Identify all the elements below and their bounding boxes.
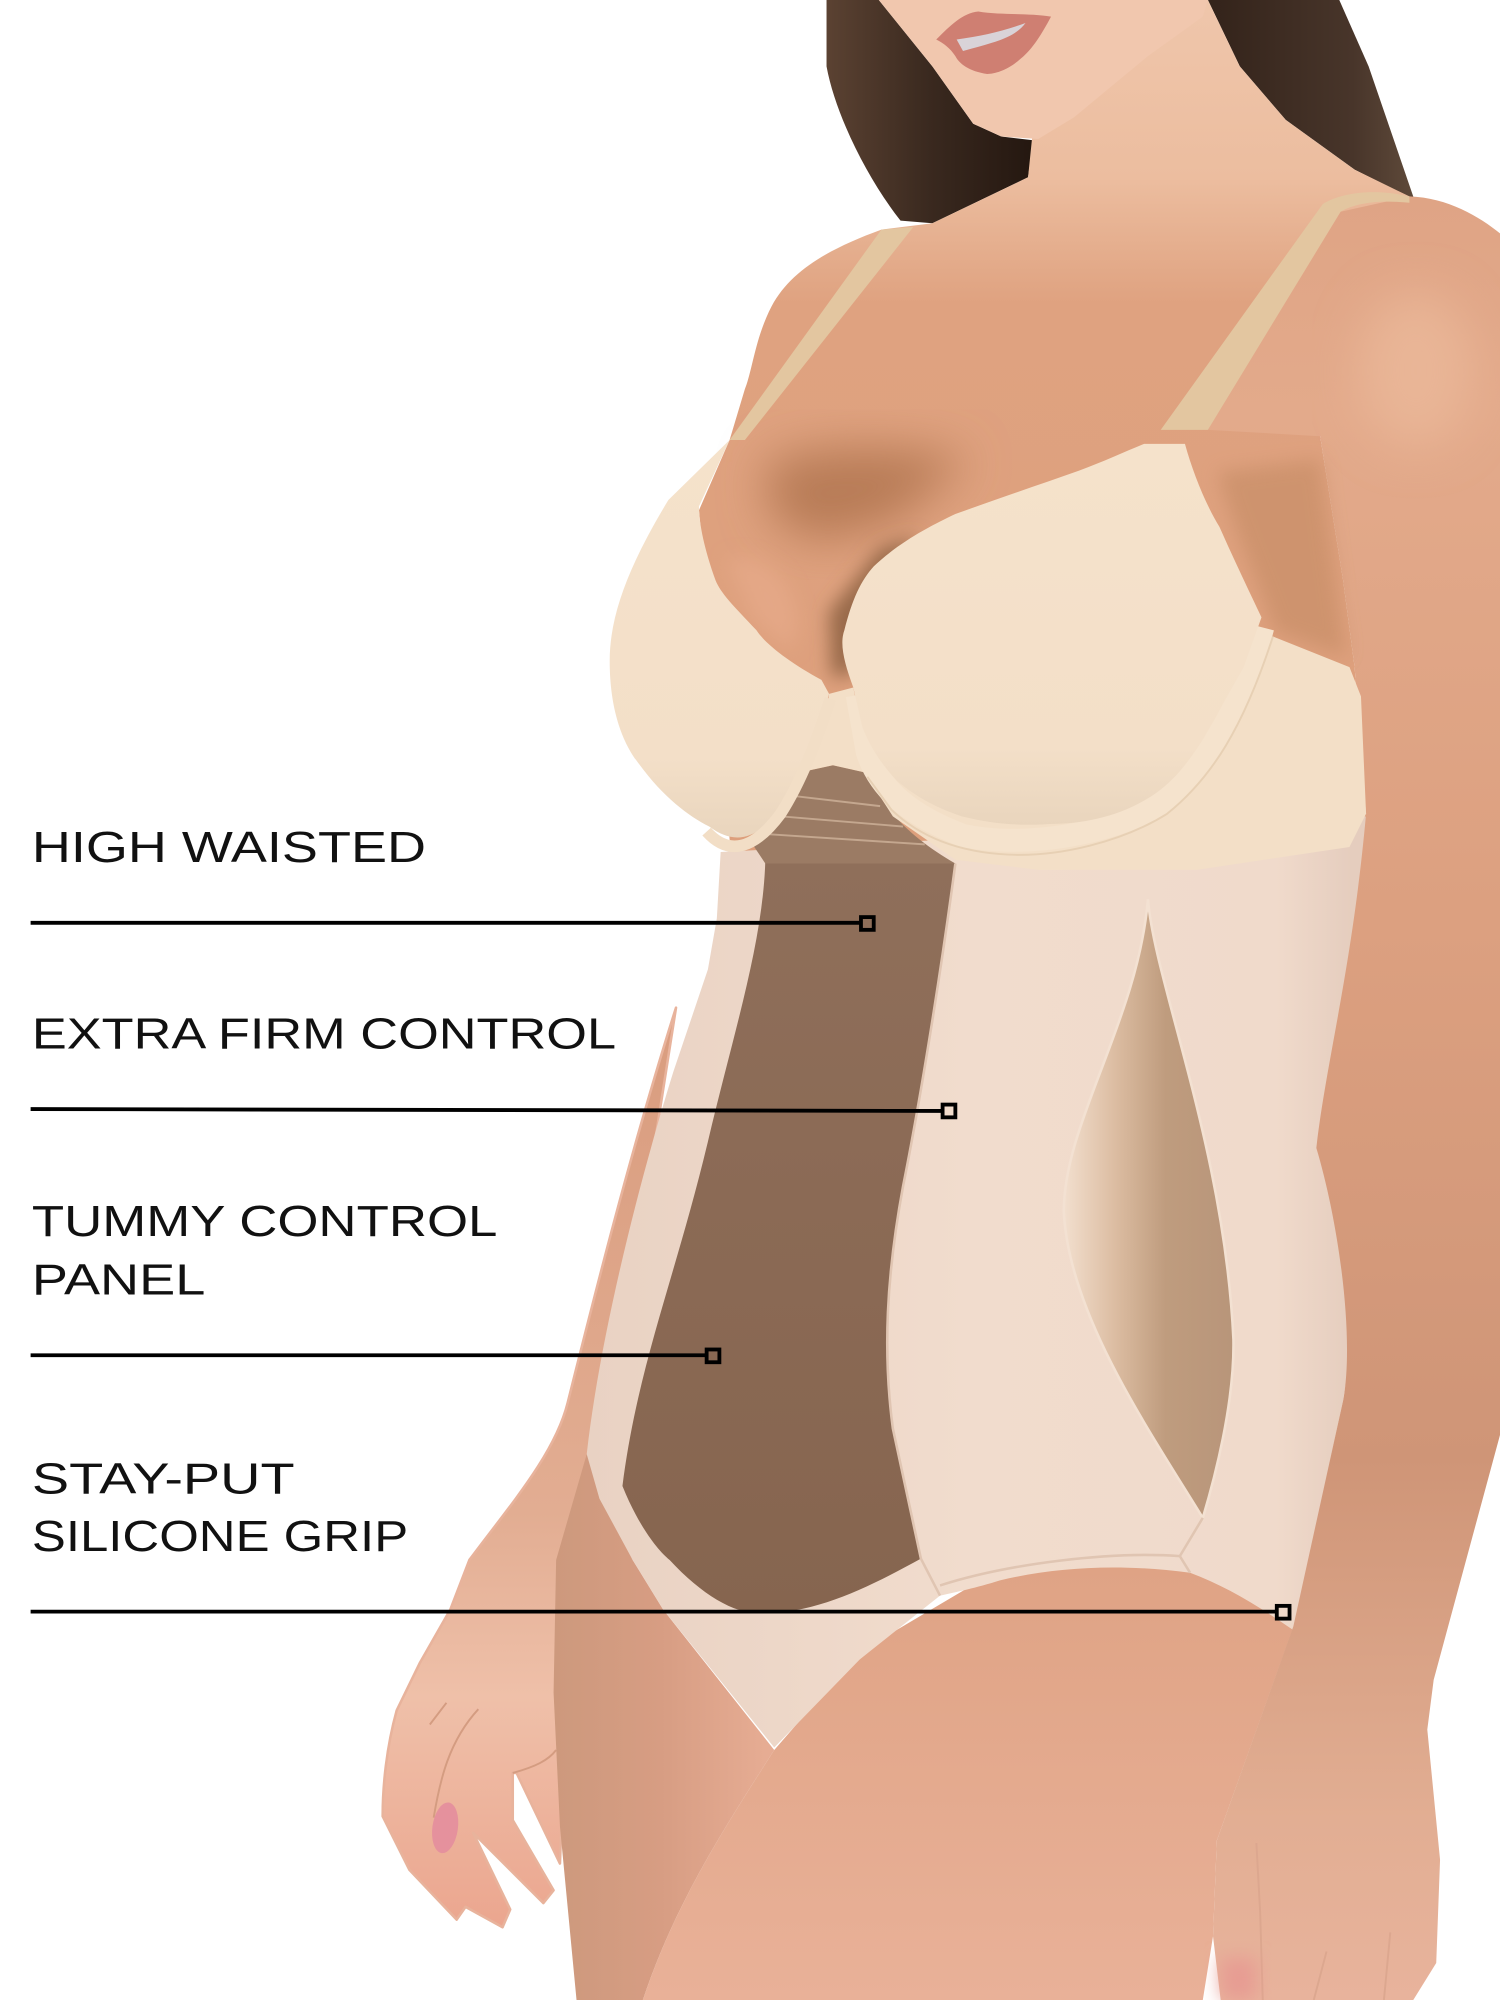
suit seams xyxy=(887,864,1203,1596)
right thigh xyxy=(643,1562,1296,2000)
callout: high waisted xyxy=(31,824,874,930)
gore xyxy=(804,688,867,773)
near arm xyxy=(1208,196,1500,2000)
teeth xyxy=(957,23,1026,51)
callout: extra firm control: EXTRA FIRM CONTROL xyxy=(32,1010,616,1058)
neck and chest xyxy=(699,0,1409,880)
fingertip tint xyxy=(1219,1958,1256,2000)
sheer top of panel xyxy=(750,765,955,864)
side satin panel xyxy=(1064,899,1233,1518)
bodysuit xyxy=(587,816,1367,1747)
left bra cup xyxy=(610,440,829,838)
callout: stay-put silicone grip xyxy=(31,1456,1290,1619)
trim outline xyxy=(867,636,1273,855)
right strap xyxy=(1161,192,1409,430)
callout: stay-put silicone grip: SILICONE GRIP xyxy=(32,1513,408,1561)
callout: tummy control panel: TUMMY CONTROL xyxy=(32,1198,497,1246)
hair right xyxy=(1208,0,1415,200)
fingernail xyxy=(429,1801,461,1855)
lips xyxy=(936,11,1051,74)
hand details xyxy=(430,1703,556,1818)
left strap xyxy=(730,227,913,440)
callout: stay-put silicone grip: STAY-PUT xyxy=(32,1456,295,1504)
back arm and hand xyxy=(383,1008,676,1927)
hair left xyxy=(827,0,1033,223)
left underwire trim xyxy=(707,699,830,846)
right bra cup xyxy=(842,444,1261,825)
tummy control panel xyxy=(622,861,955,1614)
chest highlight xyxy=(727,558,797,651)
left thigh xyxy=(554,1454,774,2000)
callout: tummy control panel xyxy=(31,1198,719,1362)
callout: high waisted: HIGH WAISTED xyxy=(32,824,426,872)
chest shadow upper xyxy=(765,448,969,542)
figure xyxy=(383,0,1500,2000)
callout: tummy control panel: PANEL xyxy=(32,1257,205,1305)
face xyxy=(879,0,1208,139)
right underwire trim xyxy=(857,628,1263,840)
right hand creases xyxy=(1256,1843,1390,2000)
callout: extra firm control xyxy=(31,1010,955,1117)
shoulder highlight xyxy=(1358,293,1473,446)
cleavage shadow xyxy=(829,536,918,676)
bra band xyxy=(867,636,1366,870)
armpit shadow xyxy=(1218,459,1346,657)
sheer stripes xyxy=(768,796,925,844)
